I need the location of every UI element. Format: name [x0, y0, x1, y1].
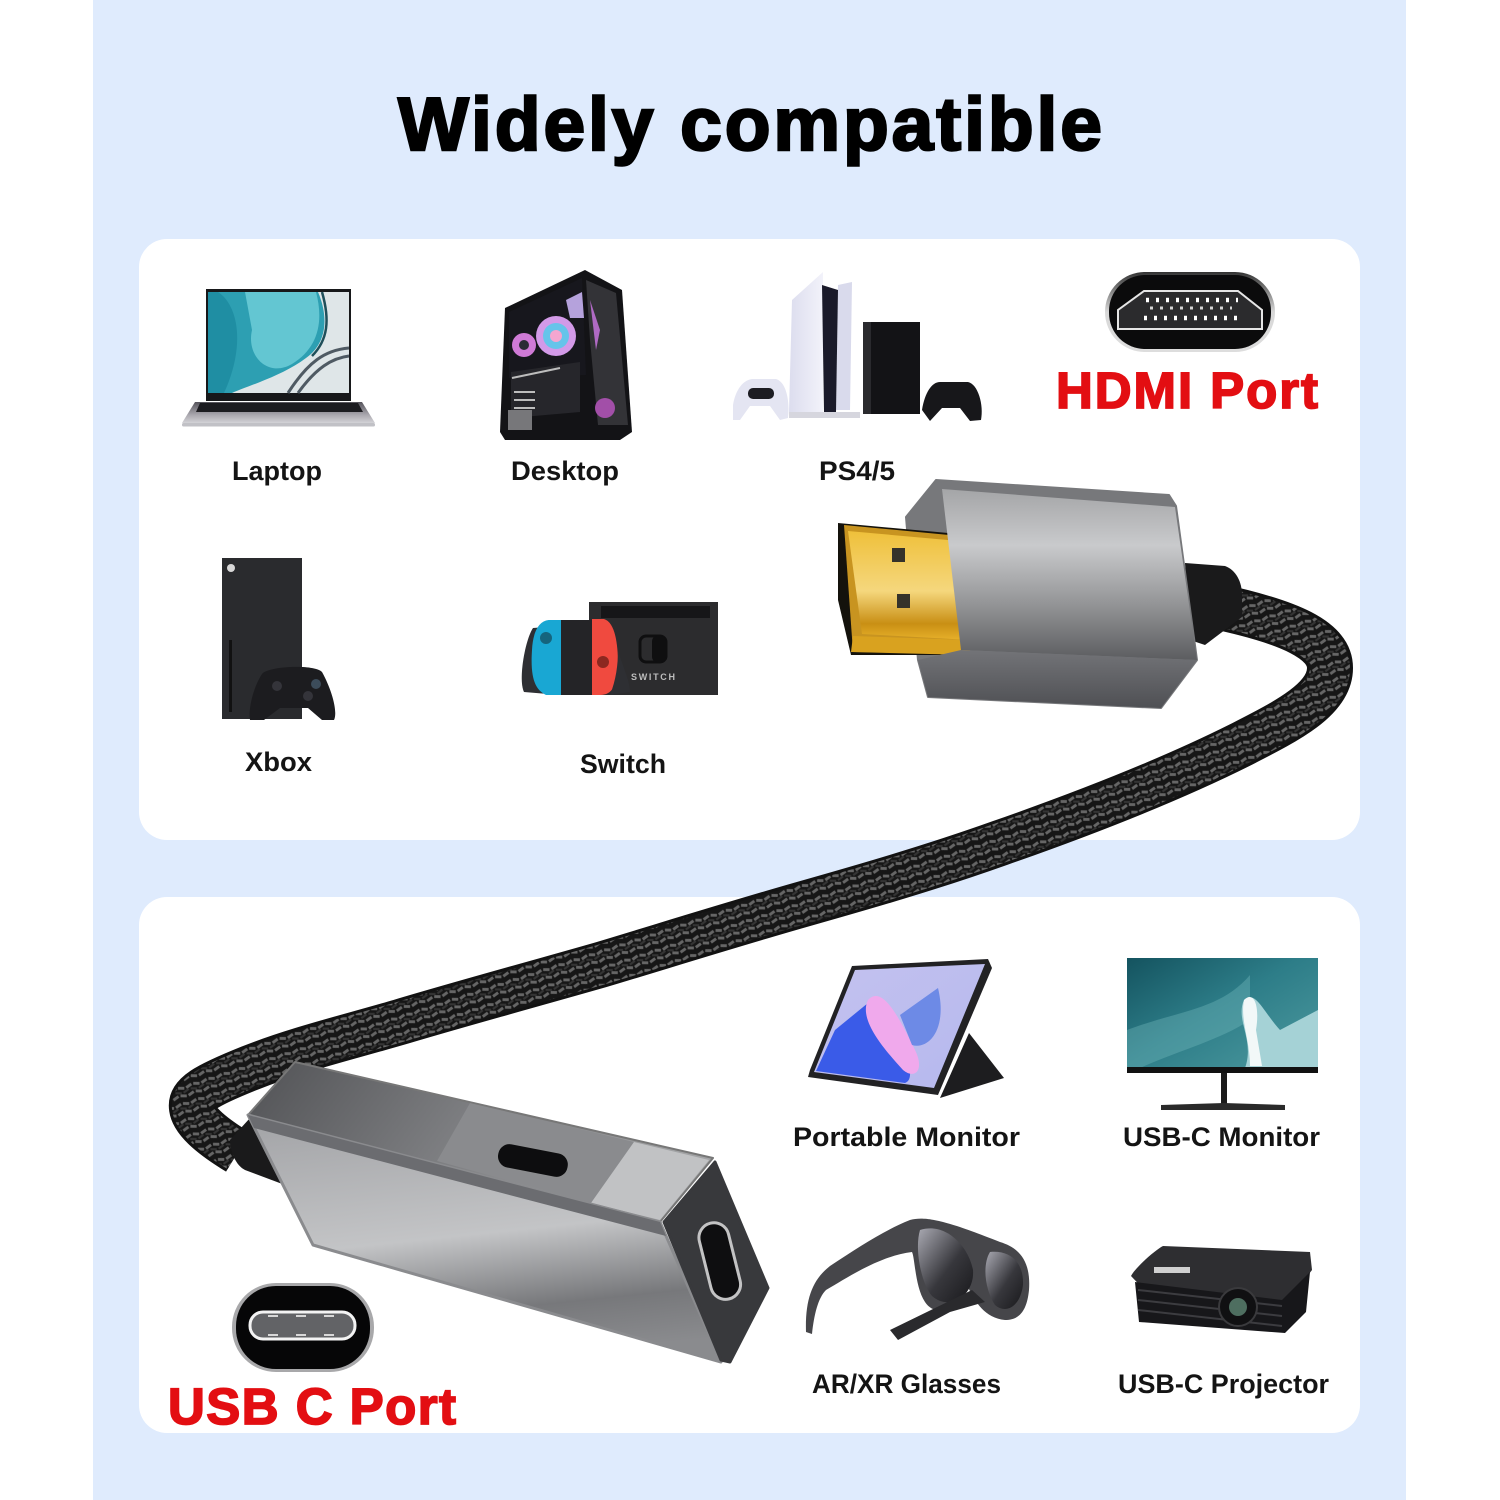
metal shell back [906, 480, 1197, 708]
label: PS4/5: PS4/5 [819, 456, 895, 486]
HDMI plug [838, 480, 1242, 708]
icon: Nintendo Switch: SWITCH [631, 672, 675, 682]
icon: USB-C monitor [1127, 958, 1318, 1110]
icon: portable monitor [808, 959, 1004, 1098]
icon: desktop tower [500, 270, 632, 440]
strain relief [230, 1118, 285, 1185]
icon: PS4 and PS5 consoles [733, 272, 982, 421]
USB C Port label: USB C Port [168, 1378, 456, 1435]
label: Xbox: Xbox [245, 747, 312, 777]
label: USB-C Projector: USB-C Projector [1118, 1369, 1329, 1399]
port: top [495, 1141, 571, 1180]
label: Portable Monitor: Portable Monitor [793, 1122, 1021, 1152]
icon: Nintendo Switch [522, 602, 718, 695]
top surface [248, 1062, 713, 1222]
HDMI Port label: HDMI Port [1056, 362, 1318, 419]
icon: USB-C projector [1131, 1246, 1312, 1333]
icon: Xbox console [222, 558, 335, 720]
strain relief [1185, 563, 1242, 645]
braided cable [192, 606, 1330, 1152]
icon: laptop [182, 289, 375, 426]
light panel [591, 1142, 709, 1220]
end face [664, 1162, 768, 1362]
port: end [696, 1220, 744, 1303]
label: Desktop: Desktop [511, 456, 619, 486]
gold connector [838, 523, 970, 655]
panel: HDMI devices [139, 239, 1360, 840]
label: AR/XR Glasses: AR/XR Glasses [812, 1369, 1001, 1399]
metal shell front [918, 489, 1197, 708]
label: USB-C Monitor: USB-C Monitor [1123, 1122, 1321, 1152]
label: Laptop: Laptop [232, 456, 322, 486]
side face [248, 1115, 721, 1362]
icon: AR/XR glasses [806, 1219, 1029, 1340]
title: Widely compatible [398, 82, 1102, 166]
icon: USB-C socket [232, 1283, 374, 1372]
USB-C adapter [230, 1062, 768, 1362]
panel: USB-C devices [139, 897, 1360, 1433]
label: Switch: Switch [580, 749, 666, 779]
recessed port panel [437, 1103, 634, 1203]
icon: HDMI socket [1105, 272, 1275, 352]
